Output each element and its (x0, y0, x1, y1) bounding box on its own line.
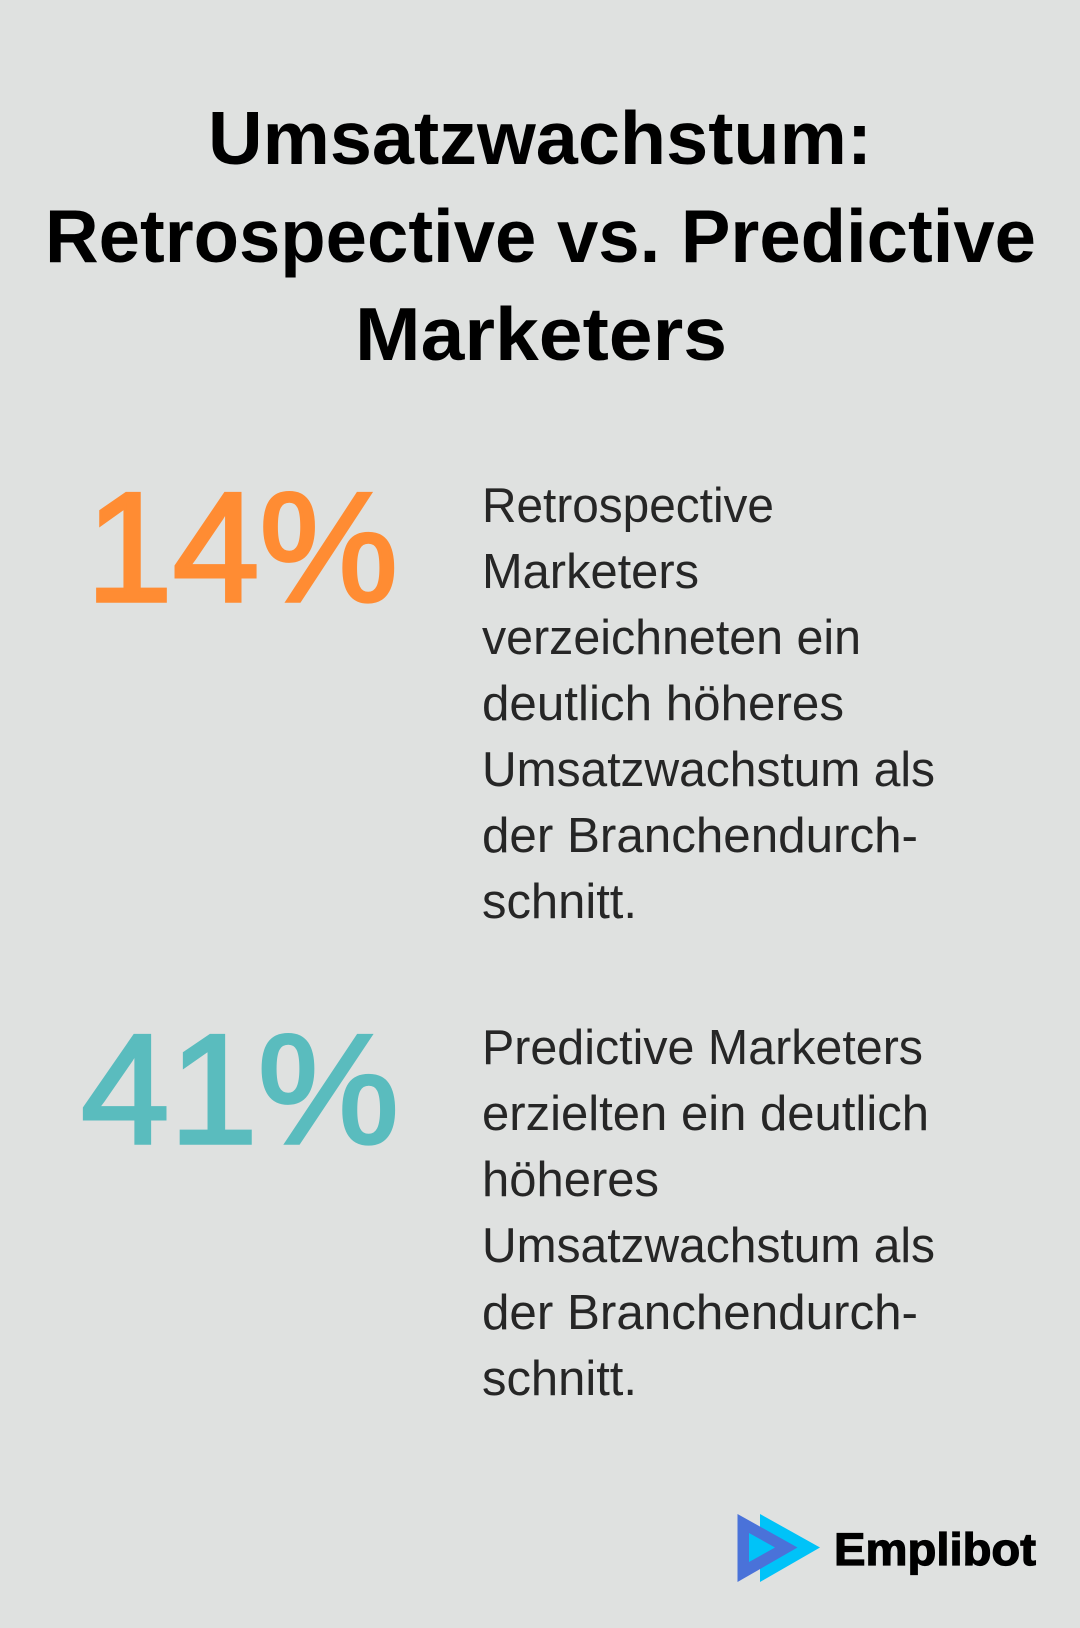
text block: predictive marketers (482, 1021, 935, 1406)
stat: 14%: 14% (86, 461, 398, 635)
text block: predictive marketers: höheres (482, 1153, 659, 1207)
icon: front triangle (738, 1514, 798, 1582)
icon: back triangle (760, 1514, 820, 1582)
text block: retrospective marketers: schnitt. (482, 875, 637, 929)
logo: Emplibot (738, 1514, 1036, 1582)
text block: predictive marketers: der Branchendurch- (482, 1286, 918, 1340)
logo wordmark: Emplibot (834, 1524, 1036, 1575)
title: Retrospective vs. Predictive (45, 194, 1036, 278)
text block: predictive marketers: Predictive Marketers (482, 1021, 923, 1075)
text block: predictive marketers: Umsatzwachstum als (482, 1219, 935, 1273)
text block: predictive marketers: erzielten ein deutlich (482, 1087, 929, 1141)
title: Umsatzwachstum: (208, 96, 872, 180)
text block: retrospective marketers: Umsatzwachstum als (482, 743, 935, 797)
text block: retrospective marketers (482, 479, 935, 929)
icon: inner triangle (749, 1533, 775, 1562)
text block: retrospective marketers: deutlich höheres (482, 677, 844, 731)
title (45, 96, 1036, 376)
text block: retrospective marketers: Retrospective (482, 479, 774, 533)
text block: retrospective marketers: Marketers (482, 545, 699, 599)
stat: 41%: 41% (81, 1003, 399, 1177)
text block: retrospective marketers: verzeichneten ein (482, 611, 861, 665)
title: Marketers (355, 292, 727, 376)
text block: retrospective marketers: der Branchendurch- (482, 809, 918, 863)
text block: predictive marketers: schnitt. (482, 1352, 637, 1406)
